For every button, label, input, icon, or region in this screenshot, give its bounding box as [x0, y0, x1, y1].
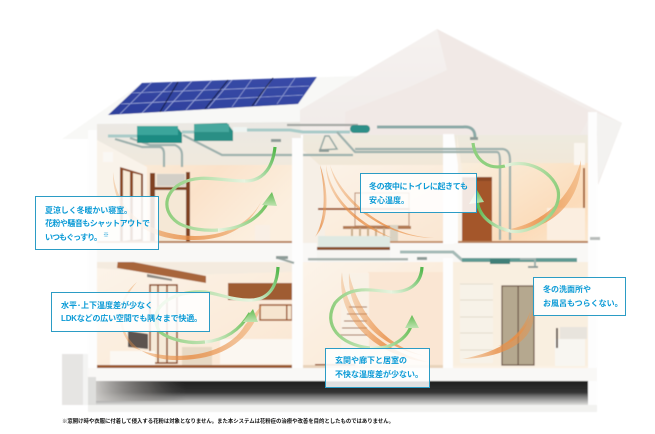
callout: LDK: LDKなどの広い空間でも隅々まで快適。 [61, 313, 202, 323]
right roof edge [597, 113, 622, 183]
callout: bedroom: 花粉や騒音もシャットアウトで [45, 218, 150, 228]
floor slab lower [88, 368, 597, 381]
lower left room [96, 259, 293, 368]
entry block [62, 354, 96, 405]
solar panel [108, 77, 317, 115]
ducts [108, 125, 577, 268]
left roof [62, 76, 358, 139]
callout: washroom: お風呂もつらくない。 [543, 299, 623, 308]
outer walls and partitions [88, 112, 597, 412]
house illustration [62, 29, 622, 412]
green cool air flow: upper left [167, 147, 277, 230]
vents [271, 137, 478, 260]
callout: washroom [534, 278, 626, 316]
callout: bedroom [36, 196, 158, 250]
callout: bedroom: いつもぐっすり。 [45, 233, 102, 242]
callout: bedroom: 夏涼しく冬暖かい寝室。 [45, 205, 132, 215]
callout: toilet: 安心温度。 [369, 195, 409, 205]
callout: entrance: 不快な温度差が少ない。 [335, 369, 423, 379]
green cool air flow: upper middle [469, 143, 559, 232]
air conditioner units [137, 123, 247, 143]
ceiling right [303, 135, 588, 168]
lower middle room [303, 262, 444, 368]
footnote: ※窓開け時や衣服に付着して侵入する花粉は対象となりません。また本システムは花粉症の治療や改善を目的としたものではありません。 [62, 417, 394, 425]
crawl space [96, 381, 588, 406]
callout: toilet [360, 174, 476, 212]
floor slab upper [90, 243, 590, 262]
callout: entrance: 玄関や廊下と居室の [335, 355, 407, 365]
upper middle room [303, 150, 443, 251]
callout: LDK: 水平･上下温度差が少なく [61, 300, 153, 310]
orange warm air flows [113, 160, 581, 362]
callout: toilet: 冬の夜中にトイレに起きても [369, 181, 468, 191]
upper right room [457, 135, 588, 243]
foundation [88, 405, 597, 412]
callout: bedroom: ※ [103, 232, 109, 239]
callout: entrance [326, 348, 430, 388]
lower right room [453, 262, 588, 370]
callout: LDK [52, 292, 210, 332]
gable inner plane [345, 29, 592, 135]
gable roof [300, 29, 622, 185]
upper left room [97, 140, 293, 243]
ceiling left [97, 122, 303, 168]
green cool air flow: lower left [156, 267, 278, 343]
right balcony ledge [590, 237, 600, 240]
duct hub [350, 125, 370, 133]
green cool air flow: lower middle [331, 267, 422, 348]
callout: washroom: 冬の洗面所や [543, 284, 591, 294]
